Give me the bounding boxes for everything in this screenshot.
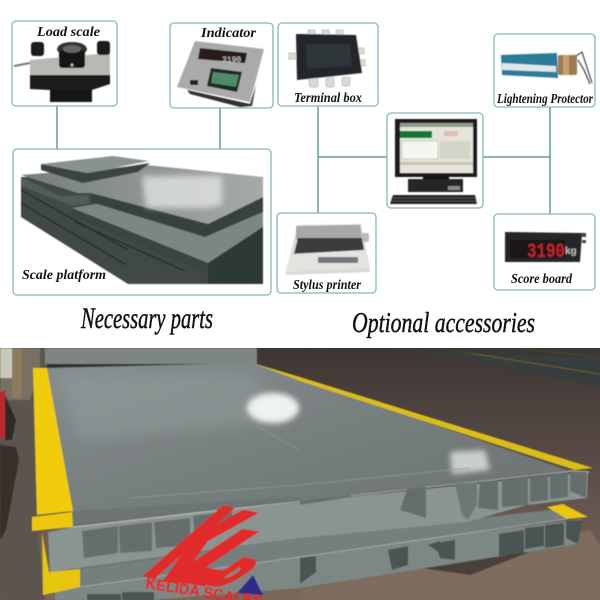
photo: stacked weighbridge platforms bbox=[0, 348, 600, 600]
floor and background bbox=[0, 348, 600, 600]
label: indicator: Indicator bbox=[200, 26, 257, 41]
panel: scale platform bbox=[13, 149, 271, 295]
upper platform side bbox=[48, 471, 589, 572]
icon: computer bbox=[390, 119, 477, 204]
panel: indicator bbox=[170, 23, 273, 108]
label: stylus printer: Stylus printer bbox=[293, 278, 361, 293]
heading: necessary parts: Necessary parts bbox=[80, 302, 213, 335]
panel: computer bbox=[387, 113, 483, 208]
icon: score board display bbox=[505, 232, 586, 264]
yellow strips bbox=[33, 368, 73, 515]
label: score board: Score board bbox=[511, 272, 573, 287]
icon: surge protector bbox=[501, 52, 592, 84]
icon: dot matrix printer bbox=[286, 224, 370, 275]
connector lines bbox=[57, 106, 550, 214]
icon: weighing indicator: 3190 bbox=[222, 56, 241, 65]
logo: Kelida Scales: D bbox=[196, 553, 270, 593]
logo: Kelida Scales: K bbox=[129, 494, 265, 595]
panel: terminal box bbox=[278, 23, 378, 106]
icon: terminal box bbox=[289, 30, 365, 87]
lower platform bbox=[42, 504, 588, 600]
icon: score board display: kg bbox=[565, 246, 577, 257]
panel: lightening protector bbox=[494, 34, 595, 107]
heading: optional accessories: Optional accessories bbox=[352, 308, 535, 339]
icon: score board display: 3190 bbox=[527, 241, 565, 264]
label: terminal box: Terminal box bbox=[294, 91, 362, 106]
panel: stylus printer bbox=[277, 213, 376, 293]
plate top bbox=[47, 363, 570, 525]
icon: load cell bbox=[14, 41, 110, 102]
reflections bbox=[60, 375, 290, 440]
panel: load scale bbox=[12, 21, 117, 106]
logo: Kelida Scales: L bbox=[151, 520, 292, 596]
label: load scale: Load scale bbox=[36, 25, 100, 40]
panel: score board bbox=[494, 214, 595, 290]
label: scale platform: Scale platform bbox=[22, 268, 106, 283]
image: stacked scale platforms bbox=[21, 156, 263, 284]
